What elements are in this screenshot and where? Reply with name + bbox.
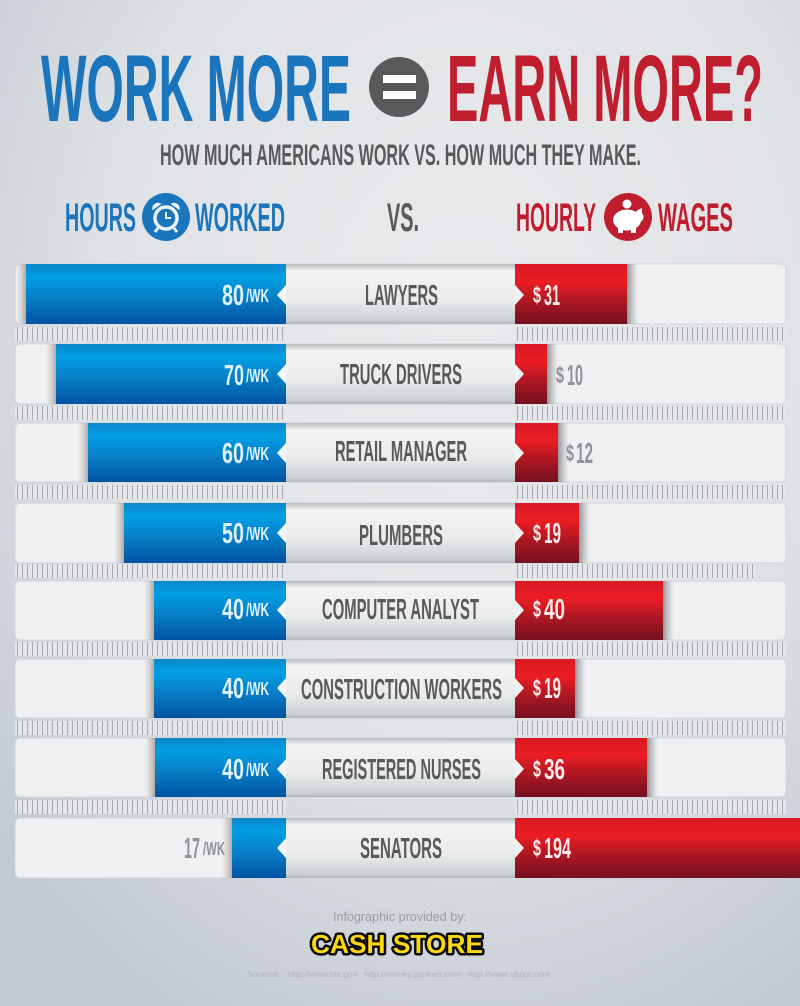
wage value: 19: [544, 518, 561, 550]
occupation label: PLUMBERS: [359, 520, 443, 552]
label plate: [277, 423, 524, 482]
wage value: $: [533, 835, 541, 861]
hours value: [222, 754, 269, 786]
row: plumbers: [15, 503, 786, 563]
wage value: [533, 518, 561, 550]
bar: hours 60: [88, 423, 286, 482]
wage value: 19: [544, 673, 561, 705]
wage value: $: [566, 440, 574, 466]
wage value: [566, 438, 593, 470]
row: truck drivers: [15, 344, 786, 404]
bar: hours 40: [154, 659, 286, 718]
wage value: $: [533, 282, 541, 308]
hours value: /WK: [203, 839, 225, 859]
label plate: [277, 818, 524, 878]
wage value: [533, 280, 560, 312]
hours value: /WK: [246, 366, 269, 386]
wage value: $: [533, 675, 541, 701]
hours value: [222, 594, 269, 626]
row: lawyers: [15, 264, 786, 324]
hours value: [222, 518, 269, 550]
bar: wage 194: [515, 818, 800, 878]
hours value: 40: [222, 673, 244, 705]
row: registered nurses: [15, 738, 786, 797]
column header: hours worked: HOURS: [65, 196, 136, 240]
wage value: $: [556, 362, 564, 388]
row: construction workers: [15, 659, 786, 718]
hours value: /WK: [246, 600, 269, 620]
hours value: [222, 438, 269, 470]
hours value: 50: [222, 518, 244, 550]
row: computer analyst: [15, 581, 786, 640]
wage value: $: [533, 756, 541, 782]
icon: alarm clock: [142, 193, 190, 241]
label plate: [277, 264, 524, 324]
icon: equals sign: [369, 57, 429, 117]
text: VS.: [387, 196, 419, 240]
bar: hours 17: [232, 818, 286, 878]
hours value: /WK: [246, 679, 269, 699]
row: truck drivers: 10: [567, 360, 583, 392]
label plate: [277, 659, 524, 718]
bar: hours 80: [26, 264, 286, 324]
icon: piggy bank: [604, 193, 652, 241]
hours value: /WK: [246, 444, 269, 464]
row: retail manager: [15, 423, 786, 482]
bar: wage 19: [515, 503, 579, 563]
wage value: $: [533, 596, 541, 622]
bar: hours 70: [56, 344, 286, 404]
logo: cash store: CASH STORE: [311, 929, 483, 959]
hours value: /WK: [246, 286, 269, 306]
hours value: /WK: [246, 524, 269, 544]
hours value: 80: [222, 280, 244, 312]
label plate: [277, 581, 524, 640]
bar: hours 40: [155, 738, 286, 797]
occupation label: RETAIL MANAGER: [335, 436, 467, 468]
column header: hours worked: [65, 193, 285, 241]
bar: wage 40: [515, 581, 663, 640]
bar: wage 36: [515, 738, 647, 797]
bar: wage 19: [515, 659, 575, 718]
hours value: /WK: [246, 760, 269, 780]
row: lawyers: 31: [544, 280, 560, 312]
occupation label: COMPUTER ANALYST: [322, 594, 479, 626]
bar: wage 12: [515, 423, 558, 482]
wage value: 12: [576, 438, 593, 470]
occupation label: CONSTRUCTION WORKERS: [301, 674, 502, 706]
wage value: [556, 360, 583, 392]
hours value: 40: [222, 754, 244, 786]
wage value: 40: [544, 594, 565, 626]
hours value: [222, 280, 269, 312]
occupation label: SENATORS: [360, 833, 442, 865]
wage value: 36: [544, 754, 565, 786]
column header: hourly wages: HOURLY: [516, 196, 596, 240]
bar: hours 50: [124, 503, 286, 563]
hours value: 40: [222, 594, 244, 626]
text: WORKED: [195, 196, 285, 240]
wage value: 194: [544, 833, 571, 865]
title: [41, 36, 763, 142]
label plate: [277, 503, 524, 563]
bar: hours 40: [154, 581, 286, 640]
label plate: [277, 738, 524, 797]
bar: wage 31: [515, 264, 627, 324]
column header: hourly wages: [516, 193, 733, 241]
wage value: [533, 594, 565, 626]
wage value: [533, 833, 571, 865]
wage value: $: [533, 520, 541, 546]
label plate: [277, 344, 524, 404]
wage value: [533, 673, 561, 705]
occupation label: LAWYERS: [365, 280, 438, 312]
footer: provided by: Infographic provided by:: [333, 909, 467, 924]
hours value: 17: [184, 833, 200, 865]
hours value: [222, 673, 269, 705]
bar: wage 10: [515, 344, 547, 404]
occupation label: TRUCK DRIVERS: [340, 359, 462, 391]
hours value: 60: [222, 438, 244, 470]
title: work more: WORK MORE: [41, 36, 351, 142]
footer: sources: Sources: http://www.bls.gov http://money.usnews.com http://www.about.com: [247, 969, 550, 979]
hours value: 70: [224, 360, 244, 392]
occupation label: REGISTERED NURSES: [322, 754, 481, 786]
wage value: [533, 754, 565, 786]
row: senators: [15, 818, 800, 878]
